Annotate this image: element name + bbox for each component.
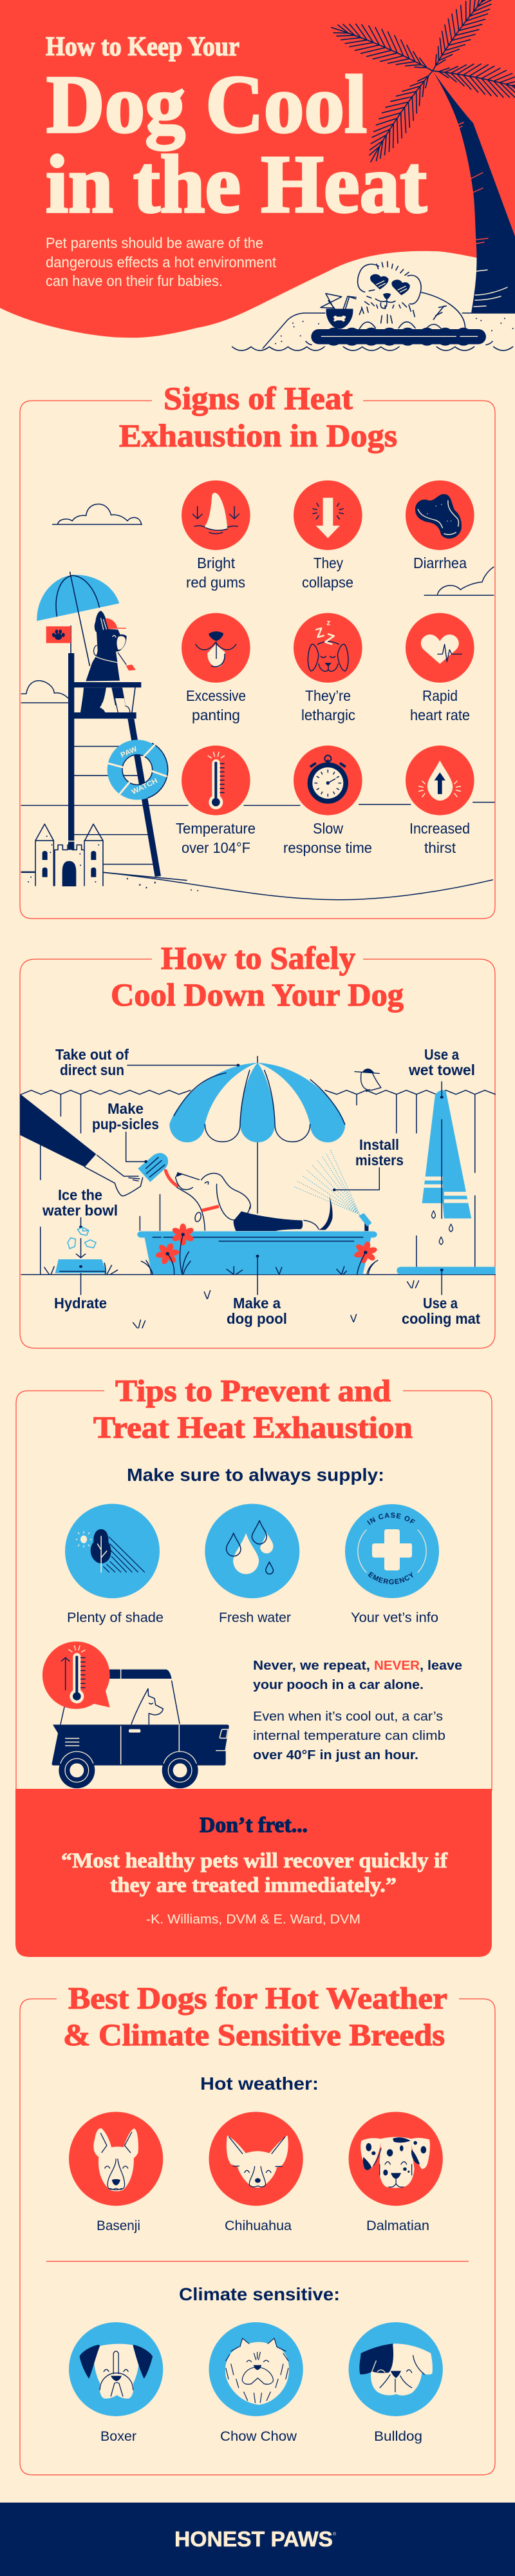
labels: cooling: Take out of	[55, 1046, 129, 1063]
icon: lethargic	[294, 613, 362, 683]
icon: lethargic: z	[326, 618, 330, 627]
icon: plenty of shade	[65, 1504, 160, 1598]
panel: hero header	[0, 0, 515, 350]
heading	[93, 1374, 413, 1445]
heading	[119, 380, 397, 453]
labels: sensitive dogs: Chow Chow	[220, 2429, 297, 2444]
arm	[20, 1094, 96, 1167]
labels: cooling: water bowl	[42, 1202, 118, 1219]
labels: supplies: Your vet’s info	[351, 1610, 438, 1625]
icon: rapid heart rate	[406, 613, 474, 683]
patio umbrella	[169, 1056, 345, 1213]
mister spray	[294, 1149, 379, 1231]
labels: signs: heart rate	[410, 707, 470, 723]
footer: brand bar: ®	[333, 2532, 337, 2537]
subheading: hot weather: Hot weather:	[200, 2074, 319, 2094]
beach umbrella	[37, 572, 119, 665]
panel: how to safely cool down	[20, 940, 495, 1348]
labels: hot weather dogs: Basenji	[97, 2218, 140, 2233]
icon: lethargic: Z	[323, 629, 337, 649]
heading: Best Dogs for Hot Weather	[68, 1981, 447, 2016]
dog: boxer	[69, 2322, 163, 2416]
panel border	[16, 1391, 492, 1791]
labels: signs: red gums	[186, 574, 245, 591]
labels: cooling: Install	[359, 1136, 399, 1153]
heading: Exhaustion in Dogs	[119, 417, 397, 453]
labels: signs: over 104°F	[182, 839, 250, 856]
lifeguard dog	[80, 611, 136, 712]
dog head	[176, 1172, 250, 1230]
labels: cooling: Make a	[233, 1295, 281, 1312]
footer: brand bar: HONEST PAWS	[174, 2527, 333, 2551]
pup-sicle	[126, 1132, 177, 1186]
labels: signs: They	[314, 555, 343, 571]
callout: don't fret: Don’t fret...	[200, 1813, 308, 1837]
labels: signs	[176, 555, 470, 856]
tower	[68, 626, 161, 877]
text: never leave in car: your pooch in a car alone.	[253, 1678, 424, 1692]
heading	[63, 1981, 447, 2052]
text: never leave in car: , leave	[420, 1659, 462, 1673]
labels: cooling: misters	[355, 1152, 404, 1169]
hand with pup-sicle and dog head	[20, 1094, 250, 1230]
labels: cooling: Make	[108, 1100, 144, 1117]
lifeguard tower with dog	[21, 572, 187, 888]
labels: signs: Slow	[313, 820, 343, 837]
icon: fresh water	[205, 1504, 299, 1598]
hand	[85, 1155, 143, 1196]
title: Dog Cool	[46, 59, 367, 150]
life ring: WATCH	[131, 777, 159, 796]
subheading: Make sure to always supply:	[127, 1465, 384, 1485]
garden leaders and ice	[55, 1064, 239, 1295]
red wave background	[0, 0, 515, 338]
illustration: dog in hot car	[42, 1641, 229, 1788]
panel: tips to prevent and treat	[15, 1374, 492, 1957]
text: never leave in car: over 40°F in just an hour.	[253, 1748, 418, 1762]
callout: don't fret: -K. Williams, DVM & E. Ward, DVM	[146, 1913, 360, 1927]
flowers and grass	[44, 1223, 419, 1328]
dog body	[234, 1196, 333, 1231]
labels: sensitive dogs: Boxer	[100, 2429, 136, 2444]
labels: cooling: direct sun	[60, 1062, 124, 1078]
heading: Signs of Heat	[164, 380, 353, 416]
labels: signs: response time	[283, 839, 372, 856]
labels: sensitive dogs: Bulldog	[374, 2429, 422, 2444]
labels: signs: Excessive	[186, 687, 246, 704]
heading	[111, 940, 404, 1013]
labels: signs: Diarrhea	[413, 555, 467, 571]
bird on fence	[355, 1069, 381, 1092]
panel: best dogs and sensitive breeds	[20, 1981, 495, 2475]
labels: cooling: Hydrate	[54, 1295, 107, 1312]
labels: signs: collapse	[302, 574, 353, 591]
labels: signs: Temperature	[176, 820, 256, 837]
dog: chow chow	[209, 2322, 303, 2416]
labels: supplies	[67, 1610, 438, 1625]
footer: brand bar	[0, 2503, 515, 2576]
icon: bright red gums	[182, 481, 250, 550]
dog: bulldog	[349, 2322, 443, 2416]
icon: panting	[182, 613, 250, 683]
car	[52, 1670, 229, 1788]
dog: basenji	[69, 2112, 163, 2206]
icon: stopwatch	[294, 745, 362, 816]
dog: dalmatian	[349, 2112, 443, 2206]
cooling mat	[397, 1267, 495, 1295]
labels: hot weather dogs: Dalmatian	[366, 2218, 429, 2233]
labels: cooling: Use a	[424, 1046, 459, 1063]
sand castle	[21, 824, 187, 888]
heading: Treat Heat Exhaustion	[93, 1411, 413, 1445]
yard scene	[21, 1056, 495, 1328]
title: How to Keep Your	[46, 32, 239, 62]
icon: vet info: IN CASE OF	[367, 1512, 416, 1525]
icon: increased thirst	[406, 745, 474, 816]
icon: collapse	[294, 481, 362, 550]
text: never leave in car: internal temperature can climb	[253, 1729, 445, 1743]
text: never leave in car: Never, we repeat,	[253, 1659, 370, 1673]
icon: vet info: EMERGENCY	[368, 1572, 413, 1585]
icon: thermometer	[182, 745, 250, 816]
intro text	[46, 234, 277, 289]
text: never leave in car: NEVER	[374, 1659, 420, 1673]
labels: cooling: pup-sicles	[92, 1116, 159, 1132]
palm tree	[327, 0, 515, 313]
intro text: Pet parents should be aware of the	[46, 234, 263, 251]
callout: don't fret	[15, 1789, 492, 1957]
labels: cooling: wet towel	[408, 1062, 475, 1078]
labels: signs: Rapid	[422, 687, 458, 704]
panel border	[20, 1999, 495, 2475]
title	[46, 32, 427, 230]
labels: hot weather dogs	[97, 2218, 429, 2233]
labels: cooling	[42, 1046, 480, 1327]
labels: signs: thirst	[424, 839, 456, 856]
heading: & Climate Sensitive Breeds	[63, 2018, 445, 2052]
labels: cooling: cooling mat	[402, 1310, 480, 1327]
text: never leave in car	[253, 1659, 462, 1762]
icon: vet info	[345, 1504, 439, 1598]
labels: signs: They’re	[305, 687, 351, 704]
speech bubble with thermometer	[42, 1641, 110, 1709]
panel: signs of heat exhaustion	[20, 380, 495, 919]
heading: Tips to Prevent and	[115, 1374, 391, 1408]
clouds, horizon and sand	[21, 504, 494, 900]
intro text: can have on their fur babies.	[46, 272, 223, 289]
labels: supplies: Plenty of shade	[67, 1610, 164, 1625]
icon: lethargic: Z	[314, 625, 326, 642]
labels: cooling: dog pool	[227, 1310, 287, 1327]
panel border	[20, 959, 495, 1348]
dog: chihuahua	[209, 2112, 303, 2206]
intro text: dangerous effects a hot environment	[46, 254, 277, 271]
callout: don't fret: “Most healthy pets will recover quickly if	[61, 1849, 448, 1873]
fence and ground	[21, 1091, 495, 1275]
labels: supplies: Fresh water	[219, 1610, 291, 1625]
labels: sensitive dogs	[100, 2429, 422, 2444]
subheading: climate sensitive: Climate sensitive:	[179, 2284, 340, 2304]
callout: don't fret: they are treated immediately.”	[110, 1874, 397, 1897]
heading: Cool Down Your Dog	[111, 977, 404, 1013]
labels: signs: Increased	[409, 820, 470, 837]
dog on a float with coconut drink	[232, 262, 515, 350]
panel border	[20, 401, 495, 919]
labels: cooling: Ice the	[58, 1187, 102, 1203]
heading: How to Safely	[161, 940, 355, 976]
labels: signs: lethargic	[301, 707, 355, 723]
title: in the Heat	[46, 138, 427, 230]
text: never leave in car: Even when it’s cool out, a car’s	[253, 1710, 443, 1724]
labels: cooling: Use a	[423, 1295, 458, 1312]
dog pool	[137, 1231, 377, 1295]
labels: hot weather dogs: Chihuahua	[225, 2218, 292, 2233]
life ring: PAW	[120, 745, 139, 759]
labels: signs: panting	[192, 707, 240, 723]
paw flag	[46, 626, 71, 643]
icon: diarrhea	[406, 481, 474, 550]
life ring	[108, 743, 168, 798]
labels: signs: Bright	[197, 555, 236, 571]
towel	[422, 1082, 471, 1245]
